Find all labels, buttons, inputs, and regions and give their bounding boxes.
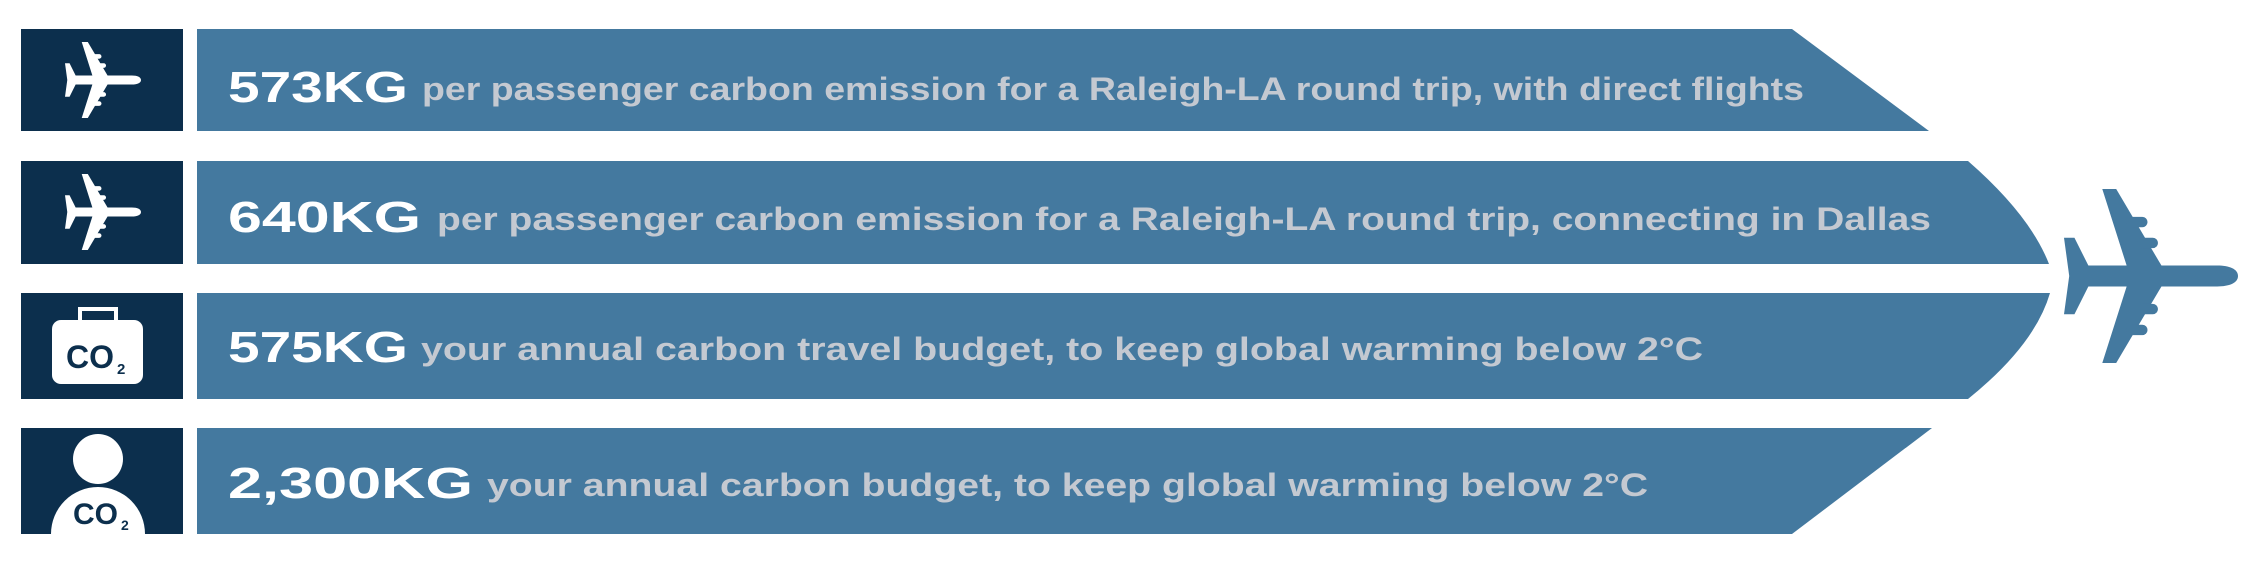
icon box: plane [21,161,183,264]
text row 1: 573KG [228,63,408,112]
row 4: annual budget [21,428,1932,534]
text row 3: your annual carbon travel budget, to keep global warming below 2°C [421,331,1703,367]
text row 2: per passenger carbon emission for a Raleigh-LA round trip, connecting in Dallas [437,201,1931,237]
bar 2 [197,161,2049,264]
bar 1 [197,29,1929,131]
row 1: direct flights [21,29,1929,131]
icon: CO2 suitcase: 2 [117,361,125,378]
icon box: plane [21,29,183,131]
text row 3 [228,323,1703,372]
text row 1 [228,63,1804,112]
bar 3 [197,293,2050,399]
row 2: connecting flights [21,161,2049,264]
text row 4: 2,300KG [228,459,473,508]
icon: CO2 suitcase [21,293,183,399]
icon: CO2 person: 2 [121,517,129,533]
text row 4 [228,459,1648,508]
text row 2: 640KG [228,193,421,242]
text row 2 [228,193,1931,242]
icon: CO2 person [21,428,183,534]
text row 4: your annual carbon budget, to keep global warming below 2°C [487,467,1648,503]
row 3: travel budget [21,293,2050,399]
text row 1: per passenger carbon emission for a Raleigh-LA round trip, with direct flights [422,71,1804,107]
icon: CO2 person: CO [73,498,118,531]
icon: CO2 suitcase: CO [66,339,114,375]
bar 4 [197,428,1932,534]
icon: large plane [2064,189,2238,363]
text row 3: 575KG [228,323,408,372]
